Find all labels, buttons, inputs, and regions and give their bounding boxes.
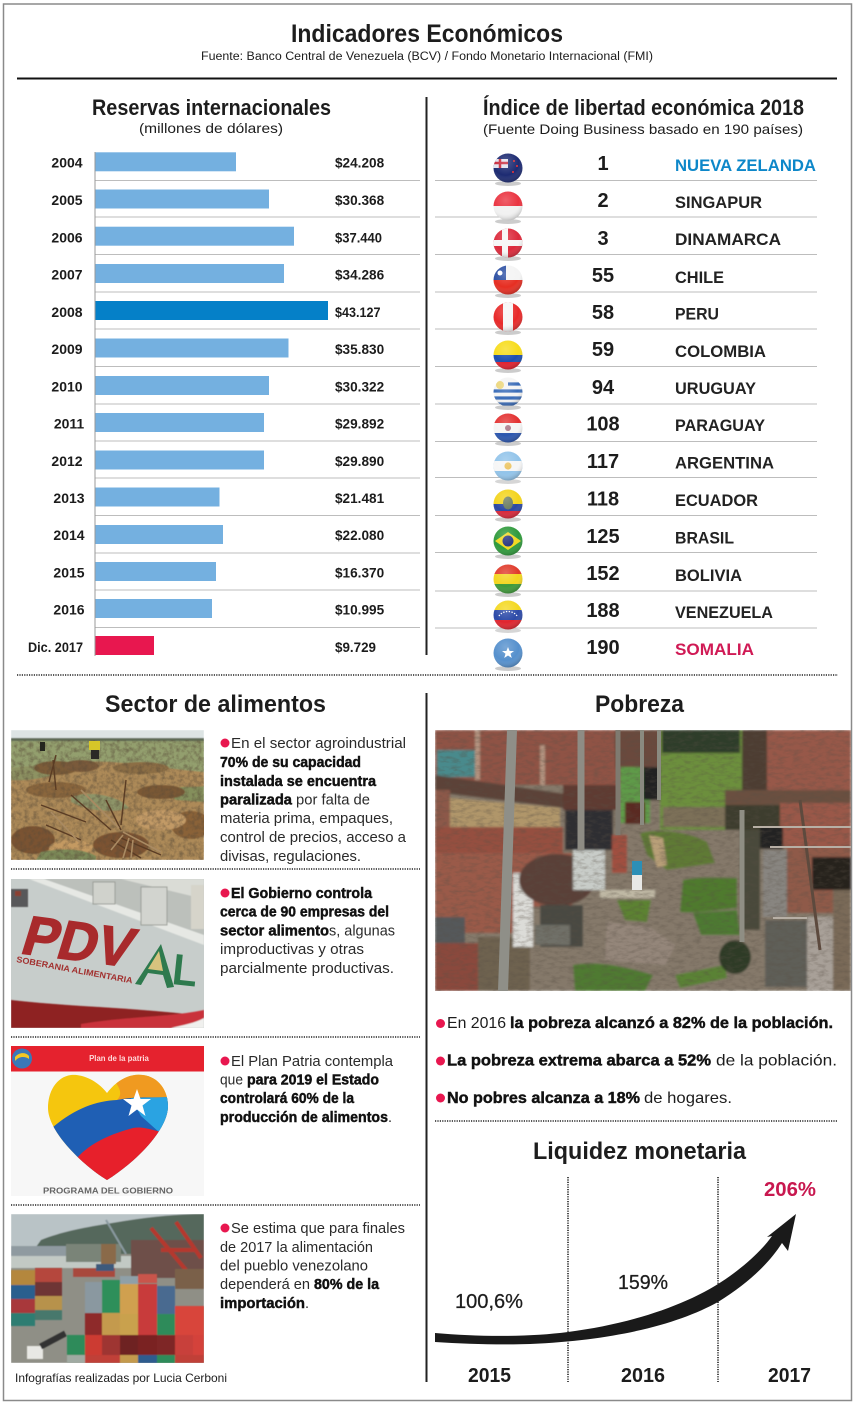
bar chart: $30.368 <box>335 193 385 208</box>
bullet: no pobres 18%: de hogares. <box>644 1090 732 1107</box>
bar chart: 2016 <box>53 602 85 618</box>
ranking numbers: 1 <box>597 153 609 175</box>
icon: flag Somalia <box>493 638 523 671</box>
country names: SINGAPUR <box>675 193 762 212</box>
image: Plan de la patria heart: Plan de la patria <box>89 1054 150 1063</box>
country names: DINAMARCA <box>675 230 781 249</box>
bar chart: $16.370 <box>335 566 384 580</box>
body text: empresas: sector alimento <box>220 924 329 940</box>
ranking numbers <box>586 153 620 659</box>
icon: flag Bolivia <box>493 564 523 597</box>
year labels: 2015 <box>468 1365 511 1387</box>
ranking numbers: 59 <box>592 339 614 361</box>
bar chart <box>28 152 420 656</box>
icon: flag Colombia <box>493 340 523 373</box>
bar chart: 2009 <box>51 341 83 357</box>
body text: importacion: del pueblo venezolano <box>220 1258 368 1274</box>
ranking numbers: 94 <box>592 377 615 399</box>
ranking numbers: 2 <box>597 190 609 212</box>
body text: empresas <box>220 886 395 977</box>
panel: reservas internacionales <box>28 95 420 656</box>
image: Plan de la patria heart: PROGRAMA DEL GOBIERNO <box>43 1186 173 1196</box>
photo: port containers <box>11 1214 204 1363</box>
ranking numbers: 58 <box>592 302 614 324</box>
body text: plan patria <box>220 1054 394 1126</box>
country names: URUGUAY <box>675 379 757 398</box>
bar chart: 2006 <box>51 230 83 246</box>
source line: Fuente: Banco Central de Venezuela (BCV) / Fondo Monetario Internacional (FMI) <box>201 51 653 63</box>
bar chart: $43.127 <box>335 305 380 320</box>
ranking numbers: 117 <box>587 451 619 473</box>
bullet: pobreza 82%: la pobreza alcanzó a 82% de la población. <box>510 1015 833 1032</box>
icon: flag Peru <box>493 302 523 335</box>
body text: plan patria: para 2019 el Estado <box>247 1072 379 1088</box>
heading: Liquidez monetaria <box>533 1138 747 1165</box>
bar chart: 2014 <box>53 527 85 543</box>
bullet: pobreza 82%: En 2016 <box>447 1015 506 1032</box>
bar chart: $35.830 <box>335 342 384 357</box>
value 2017: 206% <box>764 1179 816 1201</box>
body text: importacion: dependerá en <box>220 1277 310 1293</box>
value 2015: 100,6% <box>455 1291 523 1313</box>
body text: importacion: de 2017 la alimentación <box>220 1240 373 1256</box>
bullet: pobreza extrema 52%: La pobreza extrema abarca a 52% <box>447 1052 711 1070</box>
country names: BRASIL <box>675 528 734 548</box>
heading: Pobreza <box>595 691 685 718</box>
ranking numbers: 125 <box>586 526 620 548</box>
panel: liquidez monetaria <box>435 1138 816 1387</box>
ranking numbers: 108 <box>586 414 620 436</box>
icon: flag Argentina <box>493 451 523 484</box>
country names: BOLIVIA <box>675 566 742 585</box>
photo: PDVAL: L <box>170 945 200 997</box>
body text: empresas: El Gobierno controla <box>231 886 373 902</box>
bar chart: $37.440 <box>335 230 382 246</box>
body text: empresas: s, algunas <box>329 924 395 940</box>
country names: VENEZUELA <box>675 603 773 622</box>
icon: flag Chile <box>493 265 523 298</box>
bar chart: 2011 <box>54 416 84 432</box>
body text: agroindustria: 70% de su capacidad <box>220 755 361 771</box>
body text: importacion: Se estima que para finales <box>231 1221 405 1237</box>
bar chart: $30.322 <box>335 380 385 394</box>
body text: plan patria: El Plan Patria contempla <box>231 1054 394 1070</box>
bar chart: $21.481 <box>335 491 385 506</box>
country names: CHILE <box>675 268 724 287</box>
value 2016: 159% <box>618 1272 668 1294</box>
body text: agroindustria: instalada se encuentra <box>220 774 377 790</box>
body text: agroindustria: materia prima, empaques, <box>220 811 393 827</box>
bullet: pobreza extrema 52%: de la población. <box>716 1052 837 1070</box>
country names: PERU <box>675 304 719 324</box>
bar chart: 2015 <box>53 564 85 580</box>
subheading: (millones de dólares) <box>139 120 283 136</box>
body text: importacion: 80% de la <box>314 1277 380 1293</box>
icon: flag Denmark <box>493 228 523 261</box>
panel: sector de alimentos <box>11 691 420 1385</box>
body text: importacion <box>220 1221 405 1312</box>
country names: NUEVA ZELANDA <box>675 156 816 175</box>
heading: Reservas internacionales <box>92 95 331 120</box>
body text: importacion: . <box>305 1296 309 1312</box>
icon: flag Singapore <box>493 191 523 224</box>
title: Indicadores Económicos <box>291 20 563 48</box>
bar chart: 2008 <box>51 304 83 320</box>
ranking numbers: 152 <box>586 563 620 585</box>
icon: flag Ecuador <box>493 489 523 522</box>
icon: flag Venezuela <box>493 600 523 633</box>
year labels <box>468 1365 811 1387</box>
photo: PDVAL <box>11 879 204 1028</box>
bar chart: $9.729 <box>335 640 376 655</box>
body text: plan patria: controlará 60% de la <box>220 1091 355 1107</box>
icon: flag New Zealand <box>493 153 523 186</box>
body text: plan patria: . <box>388 1110 392 1126</box>
bar chart: 2012 <box>51 453 83 469</box>
panel: indice de libertad economica <box>435 95 817 671</box>
country names: ARGENTINA <box>675 454 774 472</box>
subheading: (Fuente Doing Business basado en 190 países) <box>483 121 803 137</box>
body text: agroindustria: paralizada <box>220 792 293 808</box>
body text: empresas: cerca de 90 empresas del <box>220 904 389 920</box>
bar chart: $29.892 <box>335 416 385 432</box>
bullet: no pobres 18% <box>436 1090 732 1107</box>
bar chart: 2004 <box>51 155 83 171</box>
body text: plan patria: que <box>220 1072 243 1088</box>
country names: PARAGUAY <box>675 416 766 435</box>
body text: agroindustria <box>220 736 407 865</box>
body text: agroindustria: En el sector agroindustrial <box>231 736 406 752</box>
body text: empresas: improductivas y otras <box>220 942 364 958</box>
credit: Infografías realizadas por Lucia Cerboni <box>15 1371 227 1385</box>
icon: flag Paraguay <box>493 413 523 446</box>
country names: COLOMBIA <box>675 342 766 361</box>
body text: agroindustria: por falta de <box>296 792 370 808</box>
bar chart: $29.890 <box>335 454 384 469</box>
photo: PDVAL: PDV <box>15 905 143 978</box>
photo: dry field <box>11 730 204 860</box>
photo: PDVAL: SOBERANIA ALIMENTARIA <box>16 954 133 985</box>
bar chart: $34.286 <box>335 268 385 282</box>
bar chart: 2013 <box>53 490 85 506</box>
bar chart: 2010 <box>51 378 83 394</box>
ranking numbers: 118 <box>587 488 619 510</box>
bar chart: 2005 <box>51 192 83 208</box>
icon: flag Brazil <box>493 526 523 559</box>
body text: plan patria: producción de alimentos <box>220 1110 388 1126</box>
year labels: 2017 <box>768 1365 811 1387</box>
body text: empresas: parcialmente productivas. <box>220 961 394 977</box>
panel: pobreza <box>435 691 851 1107</box>
body text: importacion: importación <box>220 1296 305 1312</box>
bar chart: $22.080 <box>335 528 384 543</box>
bullet: pobreza extrema 52% <box>436 1052 837 1070</box>
country names <box>675 156 816 659</box>
body text: agroindustria: control de precios, acceso a <box>220 830 407 846</box>
ranking numbers: 190 <box>586 637 620 659</box>
country names: ECUADOR <box>675 491 758 510</box>
ranking numbers: 188 <box>586 600 620 622</box>
bullet: no pobres 18%: No pobres alcanza a 18% <box>447 1090 640 1107</box>
ranking numbers: 3 <box>597 228 609 250</box>
photo: hillside neighbourhood <box>435 730 851 991</box>
heading: Sector de alimentos <box>105 691 326 718</box>
icon: flag Uruguay <box>493 377 523 410</box>
ranking numbers: 55 <box>592 265 614 287</box>
heading: Índice de libertad económica 2018 <box>483 95 804 120</box>
country names: SOMALIA <box>675 640 754 659</box>
bar chart: $24.208 <box>335 156 385 171</box>
bar chart: Dic. 2017 <box>28 639 83 655</box>
year labels: 2016 <box>621 1365 665 1387</box>
bar chart: $10.995 <box>335 602 385 618</box>
body text: agroindustria: divisas, regulaciones. <box>220 849 361 865</box>
arrow <box>435 1214 796 1344</box>
bar chart: 2007 <box>51 266 83 282</box>
image: Plan de la patria heart <box>11 1046 204 1196</box>
